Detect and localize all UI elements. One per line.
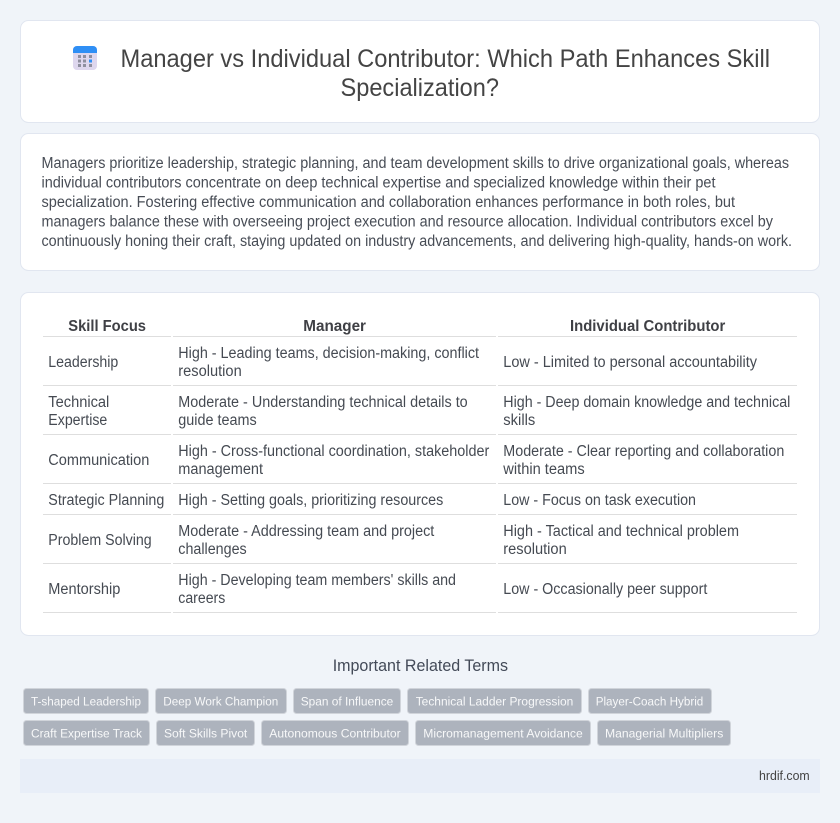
text block: introduction paragraph: specialization. Fostering effective communication and collaboration enhances performance in both roles, but [42,194,736,211]
panel: related term tags: Span of Influence [301,694,393,708]
table header row: Individual Contributor [570,318,725,335]
table row: technical expertise: High - Deep domain knowledge and technical [503,394,790,411]
table row: leadership: Low - Limited to personal accountability [503,354,757,371]
icon: calendar [73,46,97,70]
panel: related term tags: Autonomous Contributor [269,726,401,740]
footer [20,759,820,793]
table row: leadership: resolution [178,363,242,380]
panel: related term tags: Craft Expertise Track [31,726,143,740]
panel: related term tags: Managerial Multipliers [605,726,723,740]
table row: mentorship: careers [178,590,226,607]
table row: technical expertise: Technical [48,394,109,411]
text block: introduction paragraph: Managers prioritize leadership, strategic planning, and team development skills to drive organizational goals, whereas [42,155,789,172]
panel: header [20,20,820,122]
text block: introduction paragraph: individual contributors concentrate on deep technical expertise and specialized knowledge within their pet [42,174,716,192]
table row: communication [43,443,797,484]
table header row: Skill Focus [68,318,146,335]
table row: technical expertise [43,394,797,435]
panel: related term tags: Micromanagement Avoidance [423,726,583,740]
table header row [43,318,797,337]
table row: leadership: Leadership [48,354,118,371]
table row: leadership: High - Leading teams, decision-making, conflict [178,345,480,362]
table row: technical expertise: skills [503,412,536,429]
footer: hrdif.com [759,768,810,783]
text block: introduction paragraph: continuously honing their craft, staying updated on industry advancements, and delivering high-quality, hands-on work. [42,233,792,250]
table row: strategic planning: Low - Focus on task execution [503,492,696,509]
table row: problem solving: Problem Solving [48,532,152,549]
panel: comparison table [20,292,820,636]
table row: communication: Moderate - Clear reporting and collaboration [503,443,784,460]
table row: mentorship: Low - Occasionally peer support [503,581,708,598]
table row: technical expertise: Moderate - Understanding technical details to [178,394,468,411]
table row: problem solving: challenges [178,541,247,558]
table row: mentorship: Mentorship [48,581,120,598]
table row: communication: management [178,461,264,478]
panel: related term tags: Technical Ladder Progression [416,694,573,708]
table row: strategic planning: High - Setting goals, prioritizing resources [178,492,444,509]
table row: communication: within teams [502,461,585,478]
table row: problem solving [43,523,797,564]
panel: related term tags: Soft Skills Pivot [164,726,248,740]
title [120,45,770,102]
panel: related term tags: T-shaped Leadership [31,694,141,708]
heading: important related terms: Important Related Terms [333,657,508,675]
table row: mentorship [43,572,797,613]
table row: problem solving: resolution [503,541,567,558]
table row: leadership [43,345,797,386]
table header row: Manager [303,318,366,335]
title: Manager vs Individual Contributor: Which Path Enhances Skill [120,45,770,73]
title: Specialization? [340,74,499,102]
panel: related term tags: Player-Coach Hybrid [596,694,703,708]
table row: strategic planning: Strategic Planning [48,492,164,509]
table row: mentorship: High - Developing team members' skills and [178,572,456,589]
text block: introduction paragraph [42,155,792,250]
table row: technical expertise: guide teams [178,412,257,429]
table row: communication: High - Cross-functional coordination, stakeholder [178,443,489,460]
panel: related term tags: Deep Work Champion [163,694,278,708]
panel: introduction [20,134,820,270]
panel: related term tags [24,688,730,746]
table row: technical expertise: Expertise [48,412,107,429]
table row: communication: Communication [48,452,149,469]
table row: problem solving: Moderate - Addressing team and project [178,523,435,540]
table row: strategic planning [43,492,797,515]
table row: problem solving: High - Tactical and technical problem [503,523,739,540]
text block: introduction paragraph: managers balance these with overseeing project execution and resource allocation. Individual contributors excel by [42,214,773,230]
